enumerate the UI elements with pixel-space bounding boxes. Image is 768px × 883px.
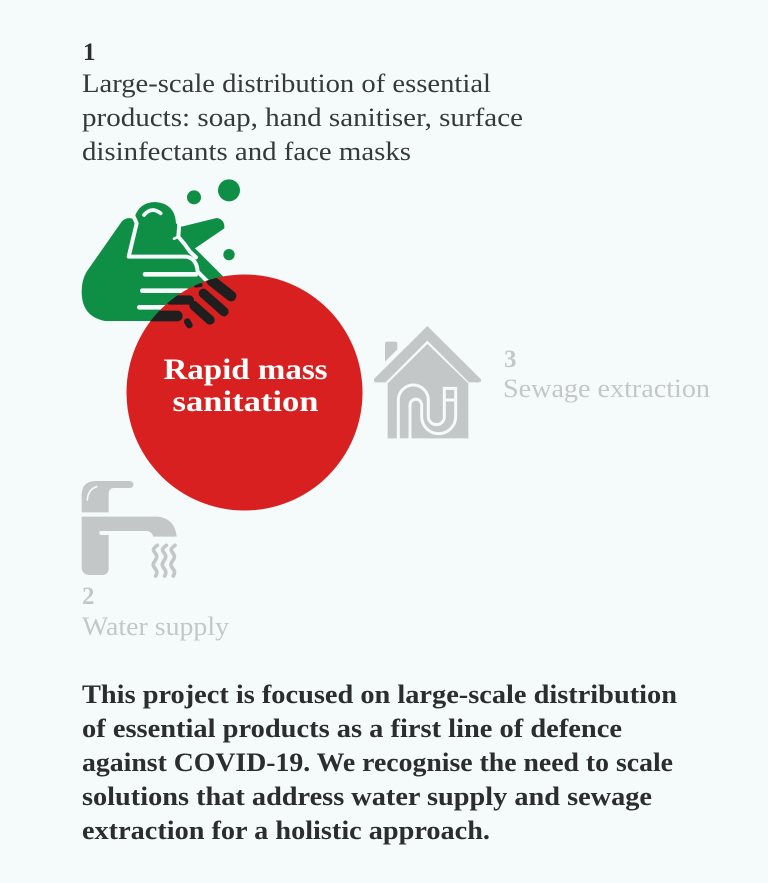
text block: project description	[82, 680, 678, 845]
label: item 2: Water supply	[82, 612, 229, 641]
text block: project description: of essential products as a first line of defence	[82, 714, 622, 743]
text block: project description: This project is focused on large-scale distribution	[82, 680, 678, 709]
label: item 3: Sewage extraction	[503, 374, 710, 403]
icon: washing hands	[82, 179, 243, 327]
label: item 2: 2	[82, 583, 94, 610]
label: item 3: 3	[504, 346, 516, 373]
icon: hand overlap on circle	[147, 281, 231, 325]
label: item 3	[503, 346, 710, 403]
text block: project description: extraction for a holistic approach.	[82, 816, 490, 845]
label: item 2	[82, 583, 229, 641]
heading: item 1: 1	[83, 39, 96, 66]
heading: item 1: disinfectants and face masks	[82, 137, 411, 166]
text block: project description: solutions that address water supply and sewage	[82, 782, 652, 811]
text block: project description: against COVID-19. We recognise the need to scale	[82, 748, 673, 777]
heading: item 1	[82, 39, 523, 166]
red circle: rapid mass sanitation: Rapid mass	[164, 353, 328, 386]
heading: item 1: products: soap, hand sanitiser, surface	[82, 103, 523, 132]
icon: house with pipe	[374, 326, 481, 439]
red circle: rapid mass sanitation: sanitation	[172, 385, 319, 418]
heading: item 1: Large-scale distribution of essential	[82, 69, 491, 98]
icon: tap	[82, 481, 177, 576]
red circle: rapid mass sanitation	[126, 274, 362, 510]
